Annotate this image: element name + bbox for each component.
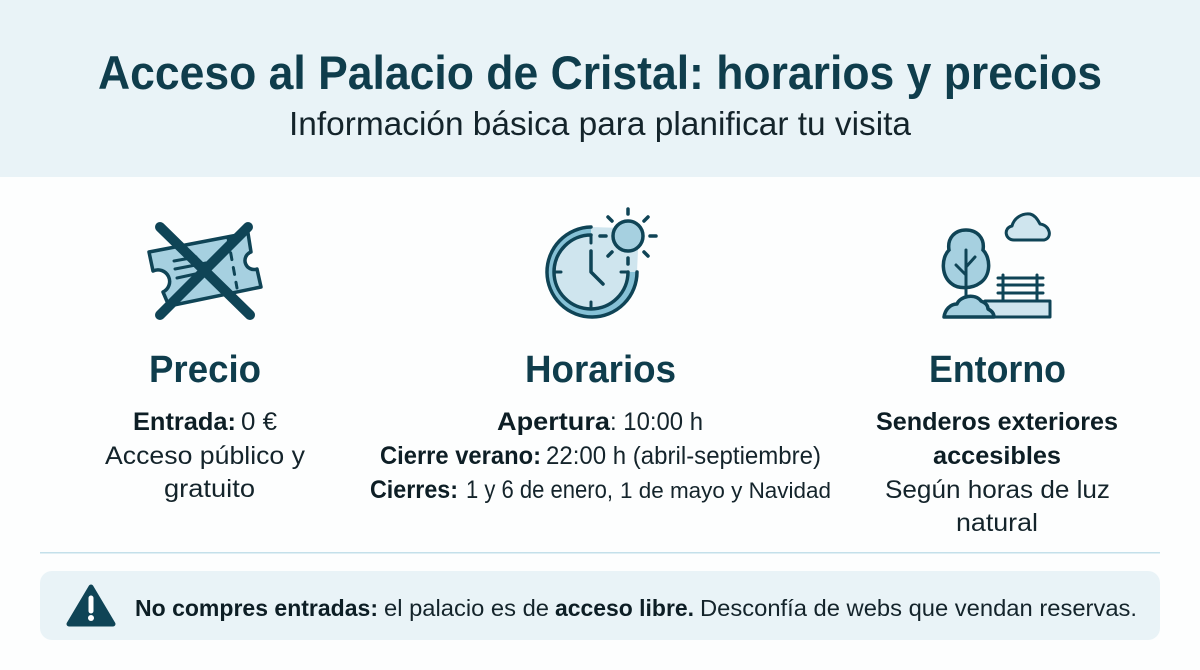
subtitle: Información básica para planificar tu visita [289,105,912,142]
icon: clock with sun [547,209,656,317]
text: price details: Entrada: [133,408,236,436]
callout text: No compres entradas: [135,595,378,621]
text: schedule details: Cierres: [370,476,458,504]
text: price details: gratuito [164,475,255,503]
text: schedule details: Cierre verano: [380,442,541,470]
callout text: Desconfía de webs que vendan reservas. [700,595,1137,621]
text: schedule details: 1 y 6 de enero, [466,476,613,504]
text: surroundings details [876,408,1118,537]
text: schedule details: : 10:00 h [610,408,703,436]
text: schedule details: 1 de mayo y Navidad [620,478,831,503]
heading: Horarios: Horarios [525,349,676,391]
callout: warning [40,571,1160,640]
text: surroundings details: Según horas de luz [885,476,1110,504]
icon: crossed-out ticket [149,227,261,315]
title: Acceso al Palacio de Cristal: horarios y precios [98,46,1102,99]
text: surroundings details: accesibles [933,442,1061,470]
panel: precio [105,227,306,503]
text: price details: 0 € [241,408,277,436]
panel: entorno [876,214,1118,537]
text: schedule details [370,408,831,504]
heading: Entorno: Entorno [929,349,1066,391]
text: schedule details: Apertura [497,408,611,436]
icon: park with tree, bench and cloud [943,214,1050,317]
callout text [135,595,1137,621]
text: price details [105,408,306,503]
callout text: el palacio es de [384,595,549,621]
panel: horarios [370,209,831,504]
callout text: acceso libre. [555,595,694,621]
text: schedule details: 22:00 h (abril-septiembre) [546,442,821,470]
text: surroundings details: Senderos exteriores [876,408,1118,436]
text: surroundings details: natural [956,509,1038,537]
heading: Precio: Precio [149,349,261,391]
text: price details: Acceso público y [105,442,306,470]
icon: warning triangle [69,587,113,624]
header band [0,0,1200,177]
